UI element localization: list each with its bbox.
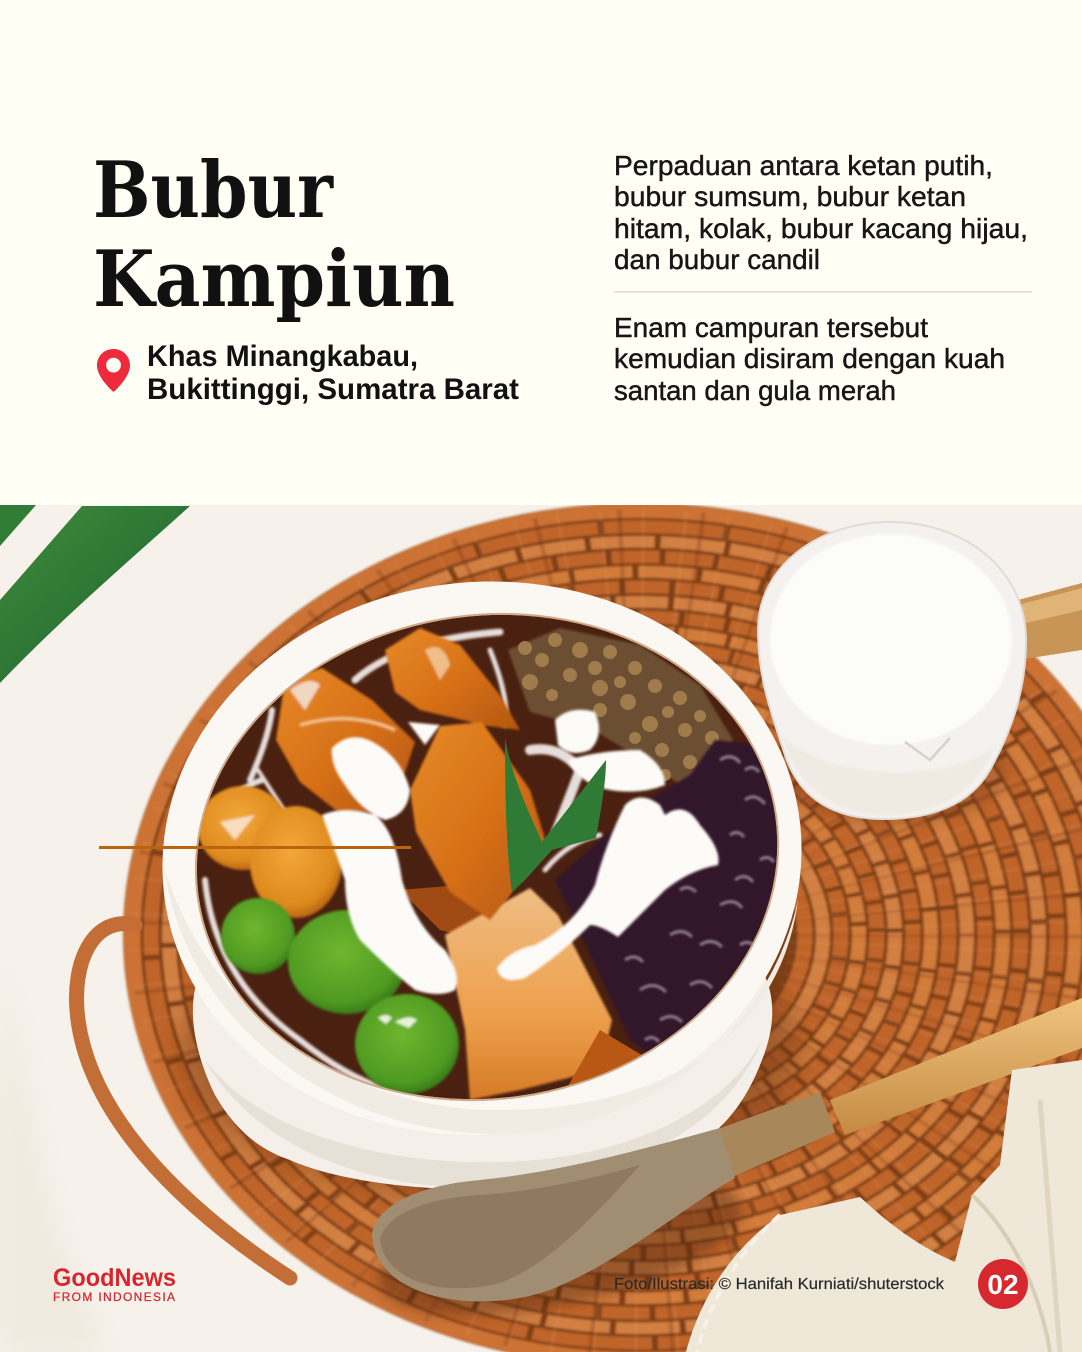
- bowl contents: [197, 614, 778, 1100]
- description: second paragraph: Enam campuran tersebut: [614, 312, 928, 343]
- title: Kampiun: [93, 234, 455, 325]
- bowl: [162, 582, 802, 1134]
- bowl base: [193, 960, 772, 1189]
- header background panel: [0, 0, 1082, 505]
- wooden spoon: [367, 998, 1082, 1342]
- mung bean porridge: [508, 628, 733, 800]
- location text: Bukittinggi, Sumatra Barat: [147, 373, 519, 406]
- icon: location pin: [97, 349, 130, 392]
- page number badge: 02: [987, 1269, 1019, 1300]
- orange glutinous rice balls: [198, 786, 342, 918]
- coconut cream drizzle: [322, 710, 719, 994]
- photo credit: Foto/Ilustrasi: © Hanifah Kurniati/shuterstock: [614, 1276, 945, 1293]
- green rice balls: [221, 898, 459, 1094]
- wicker tray: [123, 503, 1082, 1352]
- logo: GoodNews from Indonesia: GoodNews: [53, 1264, 176, 1292]
- orange accent line: [99, 846, 411, 849]
- description: first paragraph: Perpaduan antara ketan putih,: [614, 150, 993, 181]
- description: second paragraph: kemudian disiram dengan kuah: [614, 343, 1005, 374]
- title: [93, 145, 455, 325]
- banana slices: [276, 628, 546, 920]
- description: first paragraph: hitam, kolak, bubur kacang hijau,: [614, 213, 1028, 244]
- logo: GoodNews from Indonesia: FROM INDONESIA: [53, 1290, 176, 1304]
- location text: Khas Minangkabau,: [147, 340, 418, 373]
- food photo illustration: [0, 503, 1082, 1352]
- description: first paragraph: dan bubur candil: [614, 244, 820, 275]
- pandan leaf garnish: [505, 738, 606, 892]
- linen napkin: [686, 1060, 1082, 1352]
- glass jug of coconut milk: [758, 522, 1082, 825]
- black glutinous rice: [555, 740, 785, 1062]
- tray shadow under bowl: [170, 988, 811, 1204]
- description: second paragraph: [614, 312, 1005, 406]
- tray handle: [77, 924, 290, 1278]
- sweet potato piece: [445, 888, 612, 1100]
- palm sugar sauce: [197, 614, 777, 1100]
- page number badge: [978, 1259, 1028, 1309]
- description: second paragraph: santan dan gula merah: [614, 375, 896, 406]
- description: first paragraph: [614, 150, 1028, 275]
- banana leaf: [0, 505, 190, 683]
- logo: GoodNews from Indonesia: [54, 1268, 176, 1302]
- title: Bubur: [93, 145, 334, 236]
- description: first paragraph: bubur sumsum, bubur ketan: [614, 181, 966, 212]
- location text: [147, 340, 519, 406]
